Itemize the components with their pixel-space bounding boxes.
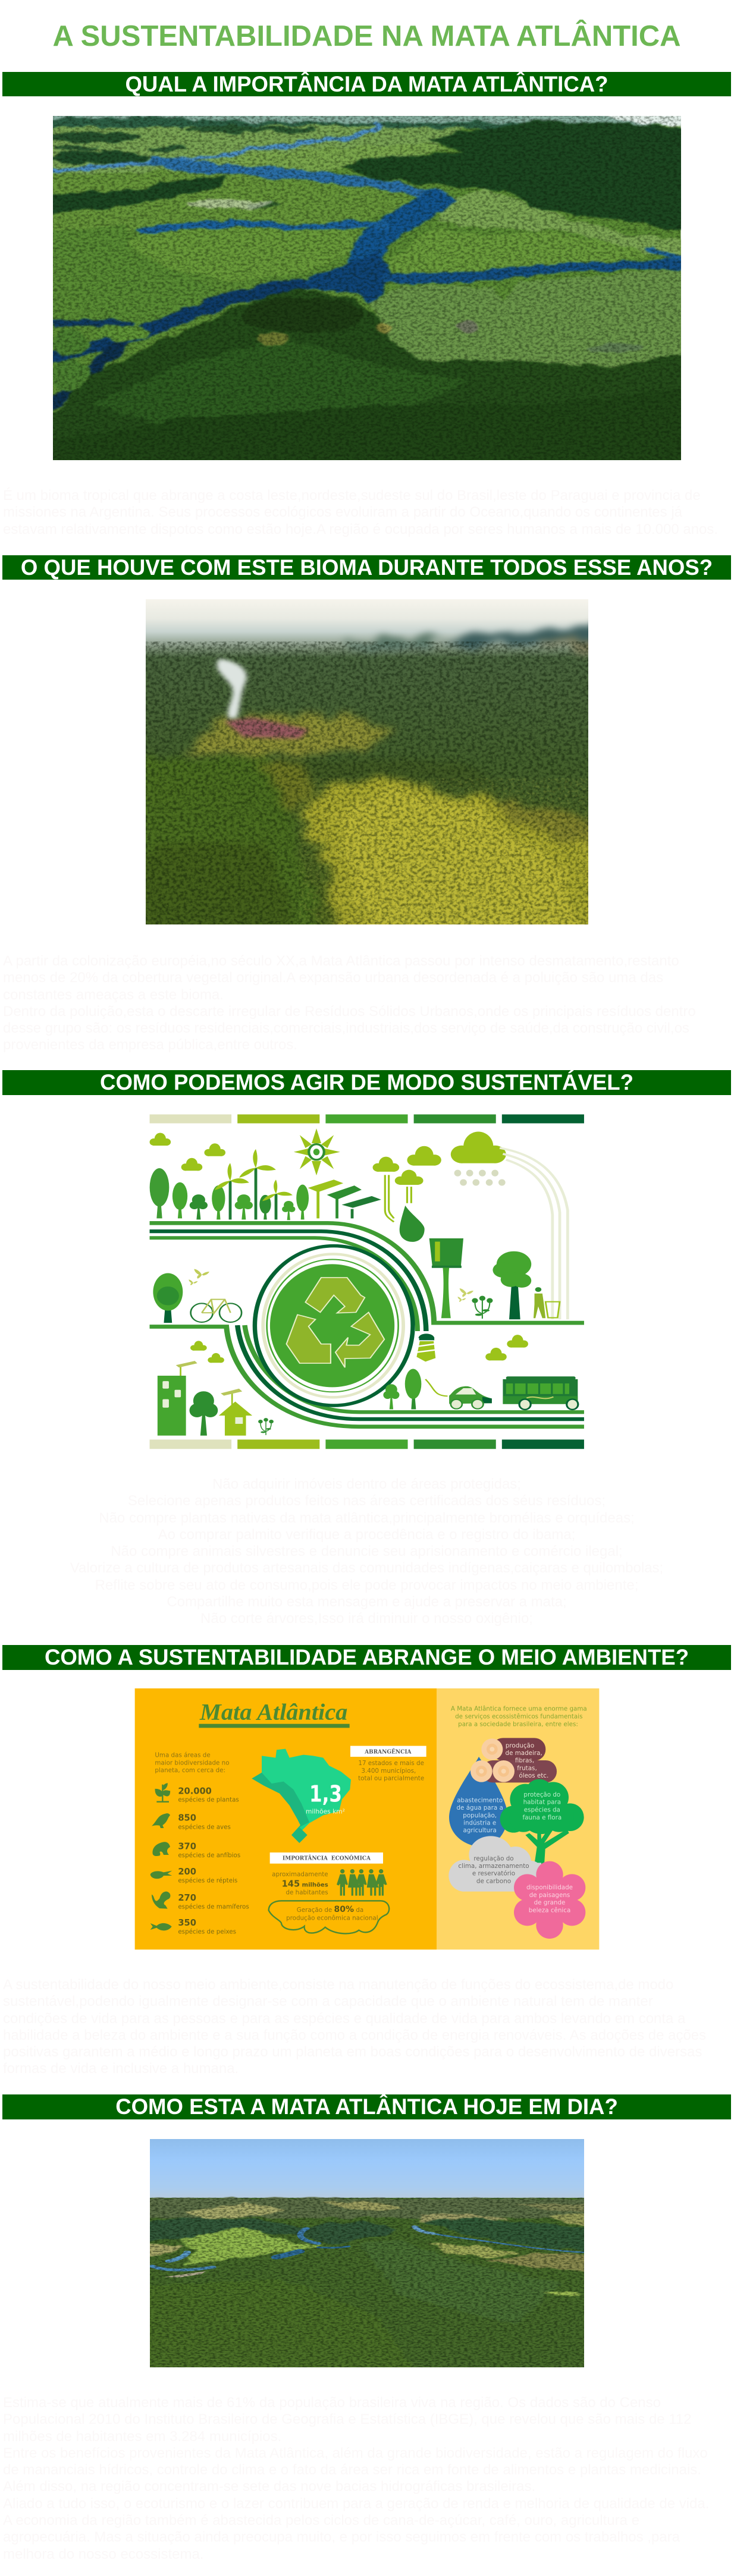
text: sustainable actions list: Não compre animais silvestres e denuncie seu aprisionamento e comércio ilegal; <box>111 1543 623 1559</box>
water drop: população, <box>463 1812 497 1819</box>
water pipes and drop <box>385 1175 425 1242</box>
text: sustainability definition: sustentável,podendo igualmente designar-se com a capacidade que o ambiente natural tem de manter <box>3 1993 653 2009</box>
heading: what happened: O QUE HOUVE COM ESTE BIOMA DURANTE TODOS ESSE ANOS? <box>21 555 713 579</box>
amphibians stat: espécies de anfíbios <box>178 1852 240 1859</box>
tree and bicycle left <box>153 1269 241 1323</box>
plug and bulb <box>416 1333 435 1361</box>
text: colonization and pollution: Dentro da poluição,esta o descarte irregular de Resíduos Sólidos Urbanos,onde os principais resíduos dentro <box>3 1004 696 1020</box>
text: colonization and pollution: constantes ameaças a este bioma. <box>3 987 224 1003</box>
pink flower: disponibilidade <box>526 1884 573 1891</box>
infographic: Mata Atlântica data <box>134 1688 600 1950</box>
sun <box>294 1128 340 1175</box>
production callout <box>269 1901 389 1933</box>
trees top row <box>150 1168 309 1220</box>
economic importance: IMPORTÂNCIA ECONÔMICA <box>283 1855 371 1862</box>
grey cloud <box>448 1836 543 1892</box>
photo: forest valley and sky <box>150 2139 584 2367</box>
text: sustainability definition: positivas garantem a médio e longo prazo um planeta em boas condições para o desenvolvimento de diversas <box>3 2044 702 2060</box>
tree: espécies da <box>524 1807 560 1814</box>
rain <box>454 1170 506 1186</box>
plants stat <box>156 1784 239 1804</box>
smoke <box>217 659 246 718</box>
text: the forest today: agropecuária. Mas a situação ainda preocupa muito, e por isso seguimos em frente com os trabalhos ,para <box>3 2529 680 2545</box>
economic importance: Geração de 80% da <box>297 1905 363 1914</box>
mammals stat: espécies de mamíferos <box>178 1904 249 1911</box>
text: sustainable actions list: Selecione apenas produtos feitos nas áreas certificadas dos séus resíduos; <box>128 1493 606 1509</box>
roadside trees, electric car and bus <box>383 1369 578 1410</box>
fish stat: espécies de peixes <box>178 1929 236 1936</box>
fish stat <box>150 1918 236 1936</box>
colour strips top <box>150 1114 584 1123</box>
rubbish bin on pole <box>429 1238 463 1318</box>
pink flower: de paisagens <box>529 1892 570 1899</box>
economic importance: produção econômica nacional <box>286 1914 378 1921</box>
Brazil map: milhões km² <box>306 1808 345 1816</box>
text: sustainable actions list: Compartilhe muito esta mensagem e ajude a preservar a mata; <box>167 1594 567 1610</box>
reptiles stat: espécies de répteis <box>178 1877 237 1885</box>
fish stat: 350 <box>178 1918 196 1928</box>
building, house and street trees <box>158 1361 274 1436</box>
plants stat: 20.000 <box>178 1786 212 1796</box>
intro text: planeta, com cerca de: <box>155 1767 225 1774</box>
grey cloud: e reservatório <box>472 1870 515 1877</box>
title: A SUSTENTABILIDADE NA MATA ATLÂNTICA <box>52 20 681 52</box>
grey cloud: regulação do <box>473 1855 514 1862</box>
logs: produção <box>506 1742 534 1749</box>
text: sustainability definition <box>3 1977 732 2078</box>
text: sustainable actions list: Valorize a cultura de produtos artesanais das comunidades indígenas,caiçaras e quilombolas; <box>70 1560 663 1576</box>
burned patch <box>224 718 309 738</box>
logs: frutas, <box>517 1764 537 1772</box>
tree: habitat para <box>523 1799 561 1806</box>
economic importance: aproximadamente <box>272 1871 328 1878</box>
water drop: agricultura <box>463 1827 497 1834</box>
text: sustainable actions list: Não compre plantas nativas da mata atlântica,principalmente bromélias e orquídeas; <box>99 1510 635 1526</box>
coverage box: total ou parcialmente <box>358 1775 424 1782</box>
text: colonization and pollution: desse grupo são: os resíduos residenciais,comerciais,industriais,dos serviço de saúde,da construção civil,os <box>3 1020 689 1036</box>
plants stat: espécies de plantas <box>178 1797 239 1804</box>
coverage box: ABRANGÊNCIA <box>364 1748 412 1755</box>
reptiles stat: 200 <box>178 1867 196 1877</box>
coverage box <box>350 1746 426 1782</box>
amphibians stat <box>152 1841 240 1859</box>
text: sustainability definition: condições de vida para as pessoas e para as espécies e qualidade de vida para ambos levando em conta a <box>3 2011 685 2027</box>
intro text: Uma das áreas de <box>155 1752 211 1759</box>
people icons <box>337 1869 387 1896</box>
tree: proteção do <box>523 1791 560 1798</box>
ecosystem services: A Mata Atlântica fornece uma enorme gama <box>451 1706 587 1713</box>
water drop <box>449 1757 507 1847</box>
ecosystem services <box>448 1706 587 1939</box>
intro text: maior biodiversidade no <box>155 1759 230 1766</box>
text: the forest today: Entre os benefícios provenientes da Mata Atlântica, além da grande biodiversidade, estão a regulagem do fluxo <box>3 2445 708 2461</box>
text: about the biome: missiones na Argentina. Seus processos ecológicos evoluiram a partir do Oceano,quando os continentes já <box>3 504 682 520</box>
text: sustainable actions list: Reflite sobre seu ato de consumo,pois ele pode provocar impactos no meio ambiente; <box>95 1577 638 1593</box>
tree: fauna e flora <box>522 1814 562 1821</box>
infographic left panel background <box>135 1688 437 1949</box>
text: the forest today: milhões de habitantes em 3.284 municípios. <box>3 2429 281 2445</box>
water drop: abastecimento <box>457 1797 503 1804</box>
text: colonization and pollution: provenientes da empresa pública,entre outros. <box>3 1037 297 1053</box>
heading: importance <box>2 71 731 96</box>
text: sustainability definition: habilidade a beleza do ambiente e a sua função como a condição de energia renováveis. As adoções de ações <box>3 2027 706 2043</box>
coverage box: 17 estados e mais de <box>358 1760 424 1767</box>
text: the forest today: Estima-se que atualmente mais de 61% da população brasileira viva na região. Os dados são do Censo <box>3 2395 661 2411</box>
text: colonization and pollution: menos de 20% da cobertura vegetal original.A expansão urbana desordenada é a poluição são uma das <box>3 970 663 986</box>
logs: fibras, <box>515 1757 534 1764</box>
grey cloud: de carbono <box>476 1877 511 1885</box>
text: the forest today: Populacional 2010 do Instituto Brasileiro de Geografia e Estatística (IBGE), que revelou que são mais de 112 <box>3 2411 692 2427</box>
recycling circle <box>255 1246 413 1405</box>
ecosystem services: para a sociedade brasileira, entre eles: <box>458 1721 578 1728</box>
birds stat <box>152 1813 231 1830</box>
text: sustainable actions list: Ao comprar palmito verifique a procedência e o registro do ibama; <box>158 1527 575 1543</box>
text: about the biome: É um bioma tropical que abrange a costa leste,nordeste,sudeste sul do Brasil,leste do Paraguai e provincia de <box>3 487 701 504</box>
pink flower: de grande <box>534 1899 565 1907</box>
species list <box>150 1784 249 1936</box>
tree and person recycling <box>457 1251 560 1319</box>
economic importance <box>269 1852 389 1933</box>
heading: today <box>2 2094 731 2119</box>
text: sustainability definition: A sustentabilidade do nosso meio ambiente,consiste na manutenção de funções do ecossistema,de modo <box>3 1977 673 1993</box>
water drop: indústria e <box>463 1819 496 1826</box>
text: colonization and pollution: A partir da colonização européia,no século XX,a Mata Atlântica passou por intenso desmatamento,restanto <box>3 953 679 969</box>
photo: deforested area with smoke <box>146 599 588 924</box>
logs: de madeira, <box>506 1750 542 1757</box>
water drop: de água para a <box>457 1804 503 1811</box>
grey cloud: clima, armazenamento <box>458 1863 529 1870</box>
economic importance: 145 milhões <box>282 1879 328 1889</box>
Brazil map: 1,3 <box>309 1781 342 1808</box>
mammals stat: 270 <box>178 1893 196 1903</box>
text: the forest today <box>3 2395 732 2563</box>
coverage box: 3.400 municípios, <box>361 1767 416 1775</box>
text: the forest today: melhora do nosso ecossistema. <box>3 2546 203 2562</box>
infographic right panel background <box>437 1688 599 1949</box>
heading: environment: COMO A SUSTENTABILIDADE ABRANGE O MEIO AMBIENTE? <box>45 1645 689 1669</box>
photo: aerial river and forest <box>53 116 681 460</box>
text: the forest today: de mananciais hídricos, controle do clima e o fato da área ser rica em fonte de alimentos e plantas medicinais. <box>3 2462 701 2478</box>
tree <box>500 1779 584 1865</box>
pink flower: beleza cênica <box>529 1907 570 1914</box>
text: sustainable actions list: Não adquirir imóveis dentro de áreas protegidas; <box>212 1476 521 1492</box>
heading: today: COMO ESTA A MATA ATLÂNTICA HOJE EM DIA? <box>115 2094 618 2119</box>
ecosystem services: de serviços ecossistêmicos fundamentais <box>455 1713 583 1720</box>
text: about the biome: estavam relativamente dispotos como estão hoje.A região é ocupada por seres humanos a mais de 10.000 anos. <box>3 521 718 537</box>
text: about the biome <box>3 487 732 538</box>
solar panels <box>308 1180 381 1218</box>
birds stat: espécies de aves <box>178 1823 231 1830</box>
text: the forest today: Aliado a tudo isso, o ecoturismo e o lazer contribuem para a geração de renda e melhoria de qualidade de vida. <box>3 2496 709 2512</box>
text: the forest today: A economia da região também é abastecida pelos ciclos de cana-de-açúcar, café, ouro, agricultura e <box>3 2512 639 2528</box>
text: sustainable actions list <box>0 1476 733 1628</box>
green ribbon lines <box>150 1148 584 1427</box>
clouds <box>150 1132 528 1363</box>
text: sustainability definition: formas de vida e inclusive a humana. <box>3 2061 239 2077</box>
infographic heading: Mata Atlântica <box>199 1699 347 1725</box>
recycle symbol <box>287 1278 384 1367</box>
Brazil map <box>252 1749 351 1843</box>
text: sustainable actions list: Não corte árvores,Isso irá diminuir o nosso oxigênio; <box>200 1611 533 1627</box>
colour strips bottom <box>150 1439 584 1449</box>
wind turbines <box>215 1149 293 1219</box>
illustration: green city and recycling <box>150 1114 584 1449</box>
amphibians stat: 370 <box>178 1841 196 1851</box>
mammals stat <box>152 1892 249 1911</box>
heading: importance: QUAL A IMPORTÂNCIA DA MATA ATLÂNTICA? <box>125 71 608 96</box>
reptiles stat <box>150 1867 237 1885</box>
logs: óleos etc. <box>519 1772 548 1779</box>
economic importance: de habitantes <box>286 1889 328 1896</box>
heading: how to act: COMO PODEMOS AGIR DE MODO SUSTENTÁVEL? <box>100 1070 633 1094</box>
text: the forest today: Além disso, na região concentram-se sete das nove bacias hidrográficas brasileiras. <box>3 2479 535 2495</box>
text: colonization and pollution <box>3 953 732 1054</box>
pink flower <box>514 1861 585 1939</box>
logs <box>470 1738 557 1782</box>
birds stat: 850 <box>178 1813 196 1823</box>
